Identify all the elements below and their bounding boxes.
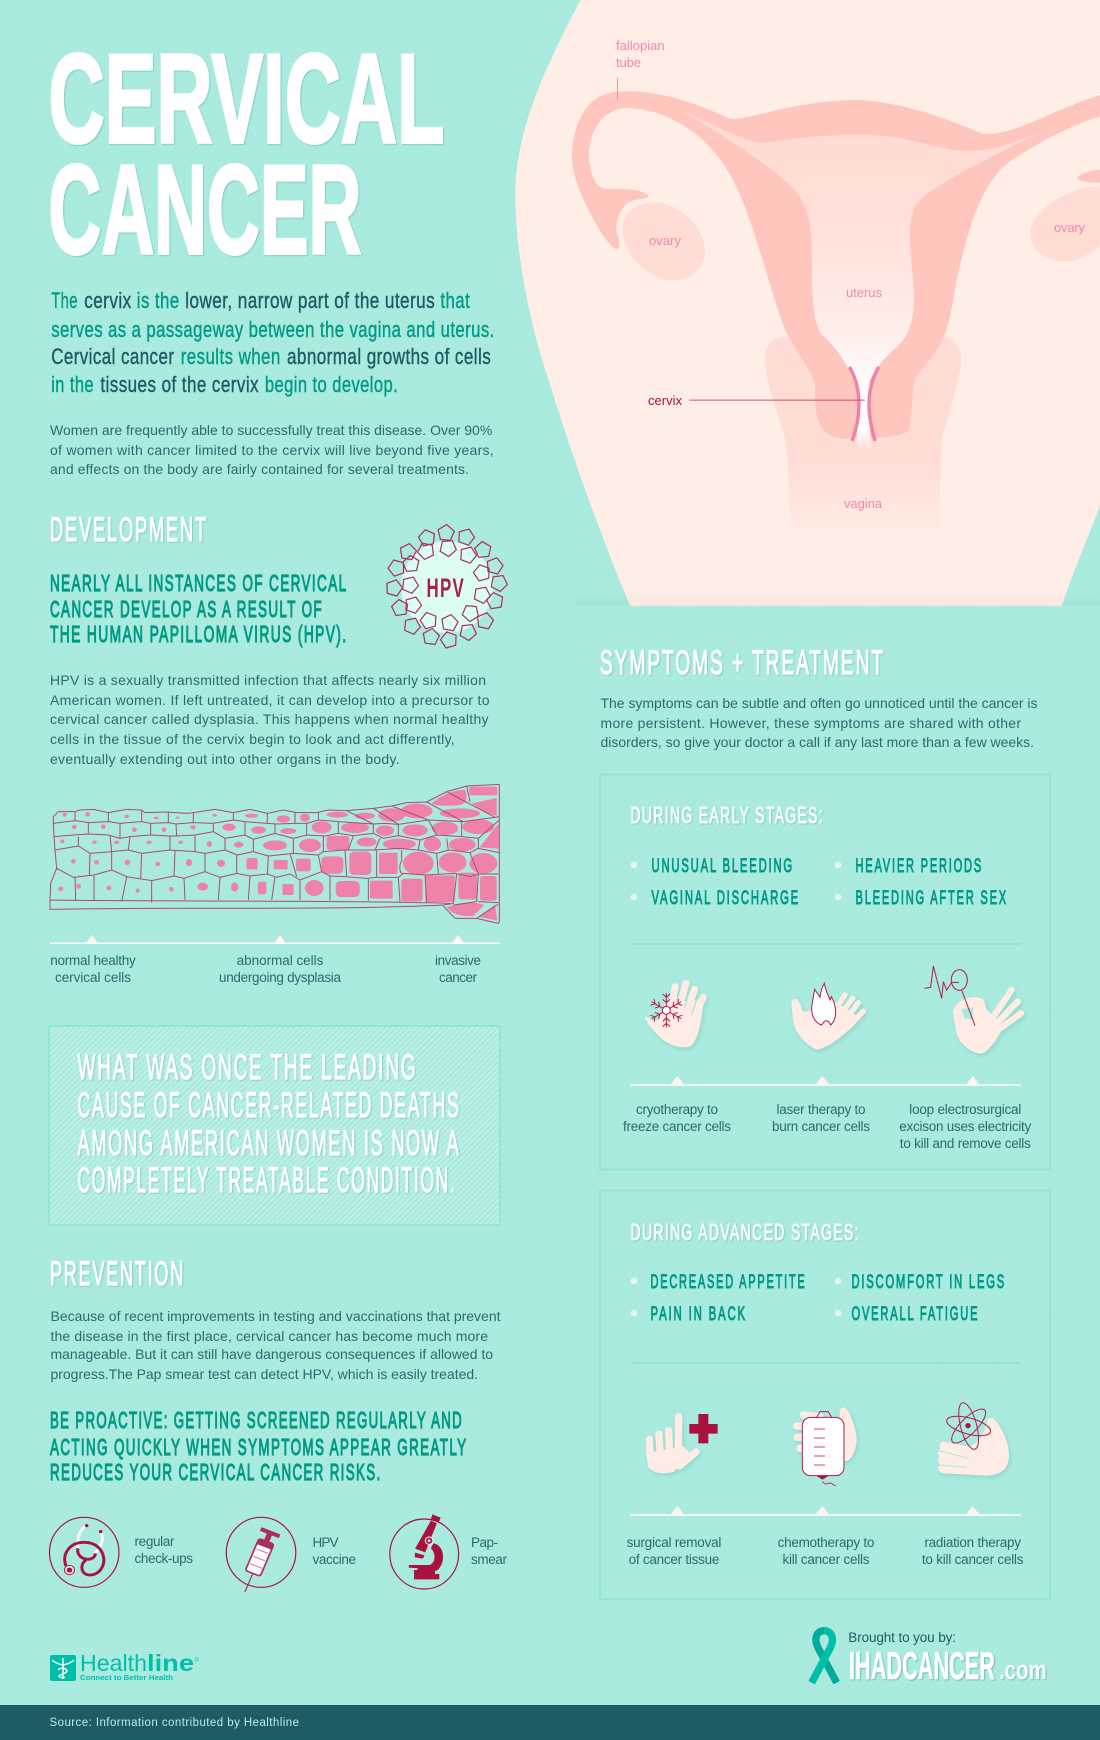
intro body text: of women with cancer limited to the cervix will live beyond five years,: [50, 442, 494, 458]
label: abnormal cells: undergoing dysplasia: [219, 970, 341, 985]
icon: hand with flame: [792, 983, 863, 1049]
wordmark: Connect to Better Health: [80, 1673, 173, 1682]
lead paragraph: cervix: [84, 288, 132, 313]
uterus wall and fallopian tubes: [572, 91, 1100, 439]
lead paragraph: The: [51, 288, 78, 313]
intro body text: and effects on the body are fairly contained for several treatments.: [50, 461, 469, 477]
label: normal cells: [50, 953, 136, 985]
label: laser therapy: [772, 1102, 870, 1134]
treatment scale: [630, 1084, 1021, 1086]
right fallopian tube end: [1077, 170, 1100, 183]
panel heading: DURING EARLY STAGES:: [630, 802, 824, 828]
development body text: HPV is a sexually transmitted infection that affects nearly six million: [50, 672, 486, 688]
label: invasive cancer: cancer: [439, 970, 478, 985]
icon: hand with cross: [647, 1414, 718, 1473]
quote text: [78, 1048, 460, 1200]
panel: advanced stages: [600, 1190, 1050, 1599]
hpv callout text: CANCER DEVELOP AS A RESULT OF: [50, 596, 323, 622]
label: pap smear: smear: [471, 1552, 508, 1567]
prevention body text: progress.The Pap smear test can detect HPV, which is easily treated.: [50, 1366, 478, 1382]
symptoms body text: [600, 695, 1038, 750]
icon: ribbon: [812, 1631, 837, 1683]
label: radiation: to kill cancer cells: [922, 1552, 1024, 1567]
wordmark: Health: [80, 1650, 147, 1676]
wordmark: line: [147, 1650, 194, 1676]
icon: hand with chemo bag: [797, 1408, 856, 1485]
icon: hand with atom: [938, 1401, 1009, 1476]
label: vagina: vagina: [844, 496, 883, 511]
development body text: cells in the tissue of the cervix begin to look and act differently,: [50, 731, 455, 747]
heading: development: DEVELOPMENT: [50, 511, 208, 549]
intro body text: [50, 422, 494, 477]
treatment scale: [630, 1514, 1021, 1516]
hpv label: HPV: [426, 573, 465, 603]
hpv callout text: [50, 570, 348, 647]
label: fallopian tube: tube: [616, 55, 641, 70]
wordmark: ®: [194, 1657, 200, 1664]
symptom list: [631, 855, 1008, 909]
label: normal cells: normal healthy: [50, 953, 136, 968]
label: cervix: cervix: [648, 393, 682, 408]
marker: cryotherapy: [670, 1076, 685, 1085]
label: surgery: of cancer tissue: [629, 1552, 719, 1567]
symptom list: DECREASED APPETITE: [650, 1271, 806, 1293]
prevention body text: manageable. But it can still have dangerous consequences if allowed to: [50, 1346, 493, 1362]
prevention body text: Because of recent improvements in testing and vaccinations that prevent: [50, 1308, 501, 1324]
logo: healthline: [50, 1650, 200, 1682]
label: loop excision: loop electrosurgical: [909, 1102, 1021, 1117]
cell nuclei: [58, 787, 499, 921]
vagina shape: [765, 336, 961, 538]
label: chemotherapy: kill cancer cells: [782, 1552, 870, 1567]
lead paragraph: that: [440, 288, 470, 313]
fallopian pointer: [616, 78, 619, 100]
marker: invasive: [452, 935, 464, 943]
panel heading: DURING ADVANCED STAGES:: [630, 1219, 860, 1245]
label: abnormal cells: abnormal cells: [237, 953, 324, 968]
label: laser therapy: burn cancer cells: [772, 1119, 870, 1134]
title: CANCER: [48, 138, 362, 280]
footer bar: [0, 1705, 1100, 1740]
label: hpv vaccine: [312, 1535, 356, 1567]
label: right ovary: ovary: [1054, 220, 1086, 235]
quote text: CAUSE OF CANCER-RELATED DEATHS: [78, 1086, 460, 1125]
sponsor wordmark: .com: [999, 1655, 1047, 1685]
label: radiation: radiation therapy: [924, 1535, 1021, 1550]
marker: laser: [815, 1076, 830, 1085]
icon: hand with loop electrode: [924, 966, 1021, 1053]
icon: hand with snowflake: [645, 983, 703, 1047]
label: chemotherapy: [778, 1535, 874, 1567]
symptom list: HEAVIER PERIODS: [856, 855, 983, 877]
label: surgery: surgical removal: [627, 1535, 721, 1550]
label: invasive cancer: invasive: [435, 953, 481, 968]
label: surgery: [627, 1535, 721, 1567]
be proactive callout: ACTING QUICKLY WHEN SYMPTOMS APPEAR GREATLY: [50, 1434, 468, 1460]
right ovary: [1030, 187, 1100, 261]
title: CERVICAL: [48, 28, 444, 170]
symptoms body text: more persistent. However, these symptoms are shared with other: [600, 715, 1021, 731]
prevention icons: [49, 1514, 459, 1596]
marker: normal: [86, 935, 98, 943]
lead paragraph: serves as a passageway between the vagina and uterus.: [51, 317, 495, 342]
lead paragraph: Cervical cancer: [51, 344, 174, 369]
lead paragraph: is the: [137, 288, 180, 313]
lead paragraph: in the: [51, 372, 94, 397]
uterine cavity: [680, 110, 1047, 449]
heading: symptoms and treatment: SYMPTOMS + TREATMENT: [600, 644, 885, 682]
label: loop excision: [899, 1102, 1032, 1151]
be proactive callout: REDUCES YOUR CERVICAL CANCER RISKS.: [50, 1459, 382, 1485]
symptoms body text: The symptoms can be subtle and often go unnoticed until the cancer is: [600, 695, 1038, 711]
symptom list: PAIN IN BACK: [650, 1303, 747, 1325]
title: [48, 28, 444, 280]
label: chemotherapy: chemotherapy to: [778, 1535, 874, 1550]
hpv callout text: NEARLY ALL INSTANCES OF CERVICAL: [50, 570, 348, 596]
source note: Source: Information contributed by Healthline: [50, 1717, 299, 1729]
label: fallopian tube: fallopian: [616, 38, 665, 53]
label: pap smear: Pap-: [471, 1535, 498, 1550]
symptom list: [631, 1271, 1006, 1325]
quote box: [49, 1026, 500, 1225]
be proactive callout: BE PROACTIVE: GETTING SCREENED REGULARLY AND: [50, 1407, 463, 1433]
label: cryotherapy: freeze cancer cells: [623, 1119, 731, 1134]
sponsor: ihadcancer: [812, 1630, 1047, 1688]
label: cryotherapy: cryotherapy to: [636, 1102, 718, 1117]
label: uterus: uterus: [846, 285, 882, 300]
heading: prevention: PREVENTION: [50, 1255, 185, 1293]
development body text: [50, 672, 490, 767]
intro body text: Women are frequently able to successfully treat this disease. Over 90%: [50, 422, 492, 438]
symptoms body text: disorders, so give your doctor a call if any last more than a few weeks.: [600, 734, 1034, 750]
wordmark: [80, 1650, 200, 1682]
cervix walls: [849, 367, 879, 441]
label: regular check-ups: regular: [134, 1534, 175, 1549]
quote text: AMONG AMERICAN WOMEN IS NOW A: [78, 1124, 460, 1163]
icon: stethoscope: [49, 1517, 119, 1587]
marker: abnormal: [274, 935, 286, 943]
label: pap smear: [471, 1535, 508, 1567]
label: cryotherapy: [623, 1102, 731, 1134]
marker: radiation: [965, 1506, 980, 1515]
label: hpv vaccine: vaccine: [312, 1552, 356, 1567]
logo mark: [50, 1655, 76, 1681]
left ovary: [622, 202, 705, 280]
cervix pointer: [689, 399, 865, 401]
symptom list: VAGINAL DISCHARGE: [652, 887, 800, 909]
brought to you by: Brought to you by:: [848, 1630, 956, 1645]
icon: microscope: [390, 1514, 459, 1589]
development body text: eventually extending out into other organs in the body.: [50, 751, 400, 767]
cell walls: [50, 784, 499, 923]
be proactive callout: [50, 1407, 468, 1485]
prevention body text: [50, 1308, 501, 1382]
lead paragraph: tissues of the cervix: [100, 372, 259, 397]
dysplasia scale: [50, 935, 500, 985]
lead paragraph: begin to develop.: [265, 372, 398, 397]
hero bottom shade: [575, 590, 1100, 606]
symptom list: OVERALL FATIGUE: [852, 1303, 979, 1325]
lead paragraph: [51, 288, 495, 397]
panel: early stages: [600, 774, 1050, 1170]
label: hpv vaccine: HPV: [312, 1535, 338, 1550]
development body text: American women. If left untreated, it can develop into a precursor to: [50, 692, 490, 708]
lead paragraph: results when: [181, 344, 281, 369]
anatomy illustration: [515, 0, 1100, 606]
marker: loop: [965, 1076, 980, 1085]
marker: chemotherapy: [815, 1506, 830, 1515]
label: regular check-ups: [134, 1534, 193, 1566]
label: regular check-ups: check-ups: [134, 1551, 193, 1566]
label: fallopian tube: [616, 38, 665, 70]
label: loop excision: to kill and remove cells: [900, 1136, 1031, 1151]
icon: hpv virus: [384, 524, 510, 649]
label: invasive cancer: [435, 953, 481, 985]
cell diagram: [50, 784, 499, 923]
prevention body text: the disease in the first place, cervical cancer has become much more: [50, 1328, 488, 1344]
body silhouette: [515, 0, 1100, 606]
label: normal cells: cervical cells: [55, 970, 131, 985]
label: left ovary: ovary: [649, 233, 682, 248]
quote text: COMPLETELY TREATABLE CONDITION.: [78, 1161, 456, 1200]
lead paragraph: abnormal growths of cells: [287, 344, 491, 369]
label: loop excision: excison uses electricity: [899, 1119, 1032, 1134]
hpv callout text: THE HUMAN PAPILLOMA VIRUS (HPV).: [50, 621, 348, 647]
icon: syringe: [226, 1517, 296, 1596]
marker: surgery: [670, 1506, 685, 1515]
lead paragraph: lower, narrow part of the uterus: [185, 288, 435, 313]
quote text: WHAT WAS ONCE THE LEADING: [78, 1048, 418, 1087]
label: abnormal cells: [219, 953, 341, 985]
development body text: cervical cancer called dysplasia. This happens when normal healthy: [50, 711, 488, 727]
label: laser therapy: laser therapy to: [776, 1102, 866, 1117]
symptom list: UNUSUAL BLEEDING: [652, 855, 794, 877]
label: radiation: [922, 1535, 1024, 1567]
